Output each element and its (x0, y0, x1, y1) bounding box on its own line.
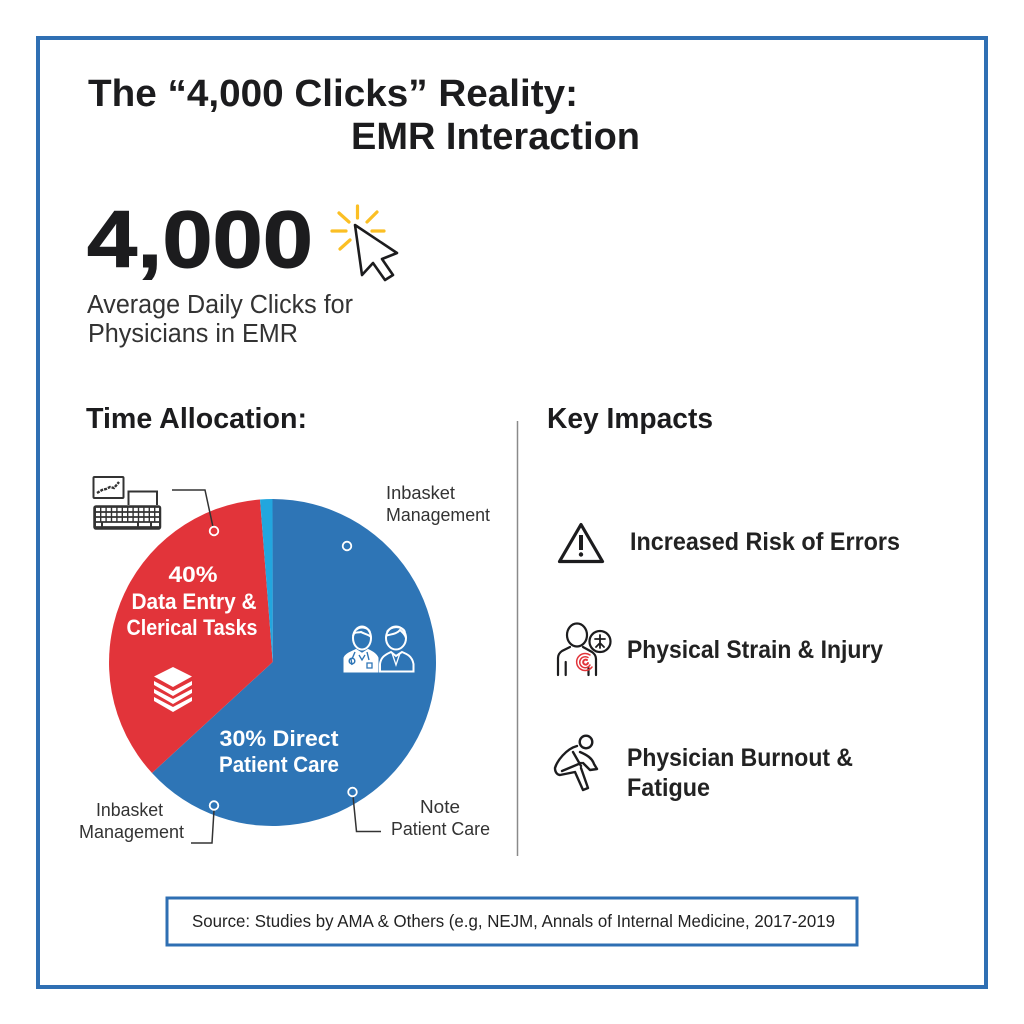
impact: physician burnout and fatigue: Fatigue (627, 774, 710, 802)
heading: time allocation: Time Allocation: (86, 403, 307, 435)
pie chart (109, 499, 436, 826)
impact: increased risk of errors (560, 524, 900, 562)
icon: slumped figure (555, 736, 597, 790)
impact: increased risk of errors: Increased Risk of Errors (630, 528, 900, 556)
daily clicks caption: Average Daily Clicks for (87, 291, 354, 319)
big number: 4,000: 4,000 (87, 195, 313, 285)
icon: doctors (344, 626, 414, 672)
callout: inbasket management top: Management (386, 505, 490, 525)
slice label: 30% direct patient care: Patient Care (219, 752, 339, 777)
slice label: 40% data entry (126, 562, 258, 640)
daily clicks caption: Physicians in EMR (88, 320, 298, 348)
source box (167, 898, 857, 945)
impact: physical strain and injury (558, 624, 883, 675)
callout: inbasket management top (343, 483, 490, 550)
slice: inbasket sliver (260, 499, 273, 662)
callout: inbasket management top: Inbasket (386, 483, 455, 503)
callout: inbasket management bottom: Inbasket (96, 800, 163, 820)
icon: computer and keyboard (94, 477, 160, 529)
impact: physician burnout and fatigue: Physician Burnout & (627, 744, 853, 772)
impact: physician burnout and fatigue (555, 736, 853, 802)
title: EMR Interaction (351, 116, 640, 158)
impact: physical strain and injury: Physical Strain & Injury (627, 636, 883, 664)
icon: stacked layers (154, 667, 192, 712)
slice label: 30% direct patient care (219, 726, 339, 777)
slice label: 30% direct patient care: 30% Direct (220, 726, 339, 751)
callout: note patient care: Note (420, 797, 460, 817)
icon: warning triangle (560, 524, 602, 562)
callout: note patient care: Patient Care (391, 819, 490, 839)
callout: inbasket management bottom (79, 800, 218, 843)
slice label: 40% data entry: 40% (168, 562, 218, 587)
daily clicks caption (87, 291, 354, 348)
callout: inbasket management bottom: Management (79, 822, 184, 842)
icon: body with shoulder pain (558, 624, 610, 675)
slice label: 40% data entry: Data Entry & (132, 589, 257, 614)
slice label: 40% data entry: Clerical Tasks (126, 615, 258, 640)
slice: direct patient care (152, 499, 436, 826)
title (88, 73, 640, 158)
icon: clicking cursor (332, 206, 397, 280)
heading: key impacts: Key Impacts (547, 403, 713, 435)
slice: data entry and clerical tasks (109, 500, 273, 773)
title: The “4,000 Clicks” Reality: (88, 73, 578, 115)
callout: keyboard icon and leader (94, 477, 218, 535)
callout: note patient care (348, 788, 490, 839)
source box: Source: Studies by AMA & Others (e.g, NEJM, Annals of Internal Medicine, 2017-2019 (192, 911, 835, 931)
